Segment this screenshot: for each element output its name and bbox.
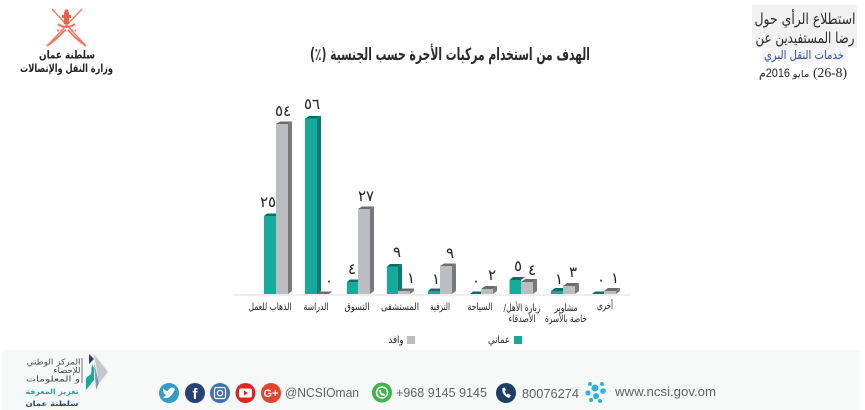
bars: entertainment	[428, 244, 456, 294]
icon: twitter	[159, 383, 179, 403]
survey heading	[752, 5, 857, 81]
NCSI name: و المعلومات	[26, 374, 80, 384]
bars: visiting family and friends: ٥	[514, 257, 522, 275]
survey dates: (26-8)	[813, 66, 847, 81]
bars: tourism: ٢	[488, 266, 496, 284]
chart title: الهدف من استخدام مركبات الأجرة حسب الجنسية (٪)	[310, 44, 590, 65]
footer background	[2, 350, 860, 410]
bars: study: ٥٦	[304, 95, 320, 113]
icon: phone	[496, 383, 516, 403]
icon: facebook: f	[192, 386, 198, 403]
survey dates: 2016م	[759, 66, 790, 80]
bar chart	[233, 95, 630, 346]
icon: NCSI mark	[86, 354, 108, 390]
bars: family errands	[551, 263, 579, 294]
survey dates: مايو	[791, 70, 810, 80]
bars: work commute: ٢٥	[260, 193, 276, 211]
bars: family errands: ٣	[569, 263, 577, 281]
category labels: الترفية	[430, 302, 450, 313]
bars: other: ١	[611, 269, 619, 287]
bars: study	[304, 95, 333, 294]
bars: tourism	[470, 266, 497, 294]
category labels: مشاوير	[554, 303, 578, 314]
hotline number: 80076274	[522, 387, 579, 401]
bars: work commute	[260, 102, 292, 294]
ministry logo	[20, 9, 113, 75]
bars: entertainment: ٩	[446, 244, 454, 262]
survey dates	[759, 66, 847, 81]
bars: shopping	[347, 187, 374, 294]
bars: shopping: ٤	[348, 260, 356, 278]
bars: entertainment: ١	[432, 270, 440, 288]
NCSI name: المركز الوطني	[26, 358, 80, 366]
bars: hospital: ٩	[393, 243, 401, 261]
ministry name line 2: وزارة النقل والإتصالات	[20, 62, 113, 75]
category labels: التسوق	[344, 302, 370, 313]
axis line	[233, 294, 630, 296]
Oman caption: سلطنة عمان	[26, 400, 79, 408]
icon: whatsapp	[372, 382, 392, 402]
category labels	[248, 299, 613, 325]
whatsapp number: +968 9145 9145	[396, 386, 487, 400]
NCSI motto: تعزيز المعرفة	[26, 388, 79, 396]
icon: Oman emblem	[47, 9, 86, 46]
legend	[388, 335, 522, 346]
bars: family errands: ١	[555, 270, 563, 288]
heading line 3: خدمات النقل البري	[764, 48, 844, 63]
social handle: @NCSIOman	[285, 386, 359, 400]
social media icons	[159, 383, 281, 403]
category labels: أخرى	[597, 299, 613, 312]
category labels: زيارة الأهل/	[504, 301, 541, 314]
category labels: المستشفى	[381, 302, 419, 313]
bars: other: ٠	[597, 271, 605, 289]
bars: hospital: ١	[407, 269, 415, 287]
category labels: الأصدقاء	[508, 312, 536, 325]
NCSI logo	[26, 354, 108, 408]
icon: google plus: G+	[264, 388, 278, 400]
NCSI name: للإحصاء	[54, 366, 80, 376]
website: www.ncsi.gov.om	[614, 385, 716, 399]
icon: globe	[585, 382, 606, 403]
bars: study: ٠	[325, 272, 333, 290]
bars: other	[592, 269, 620, 294]
icon: instagram	[210, 383, 230, 403]
bars: visiting family and friends: ٤	[528, 261, 536, 279]
icon: youtube	[236, 383, 256, 403]
bars: visiting family and friends	[510, 257, 537, 294]
NCSI name	[26, 358, 80, 384]
category labels: الدراسة	[304, 302, 328, 313]
category labels: السياحة	[468, 302, 492, 313]
bars: hospital	[387, 243, 415, 294]
bars: shopping: ٢٧	[358, 187, 374, 205]
bars: work commute: ٥٤	[275, 102, 291, 120]
ministry name line 1: سلطنة عمان	[39, 48, 95, 62]
bars: tourism: ٠	[472, 272, 480, 290]
legend: expatriate: وافد	[388, 335, 404, 346]
category labels: خاصة بالأسرة	[545, 312, 587, 325]
legend: Omani: عماني	[488, 335, 510, 346]
category labels: الذهاب للعمل	[248, 302, 292, 313]
